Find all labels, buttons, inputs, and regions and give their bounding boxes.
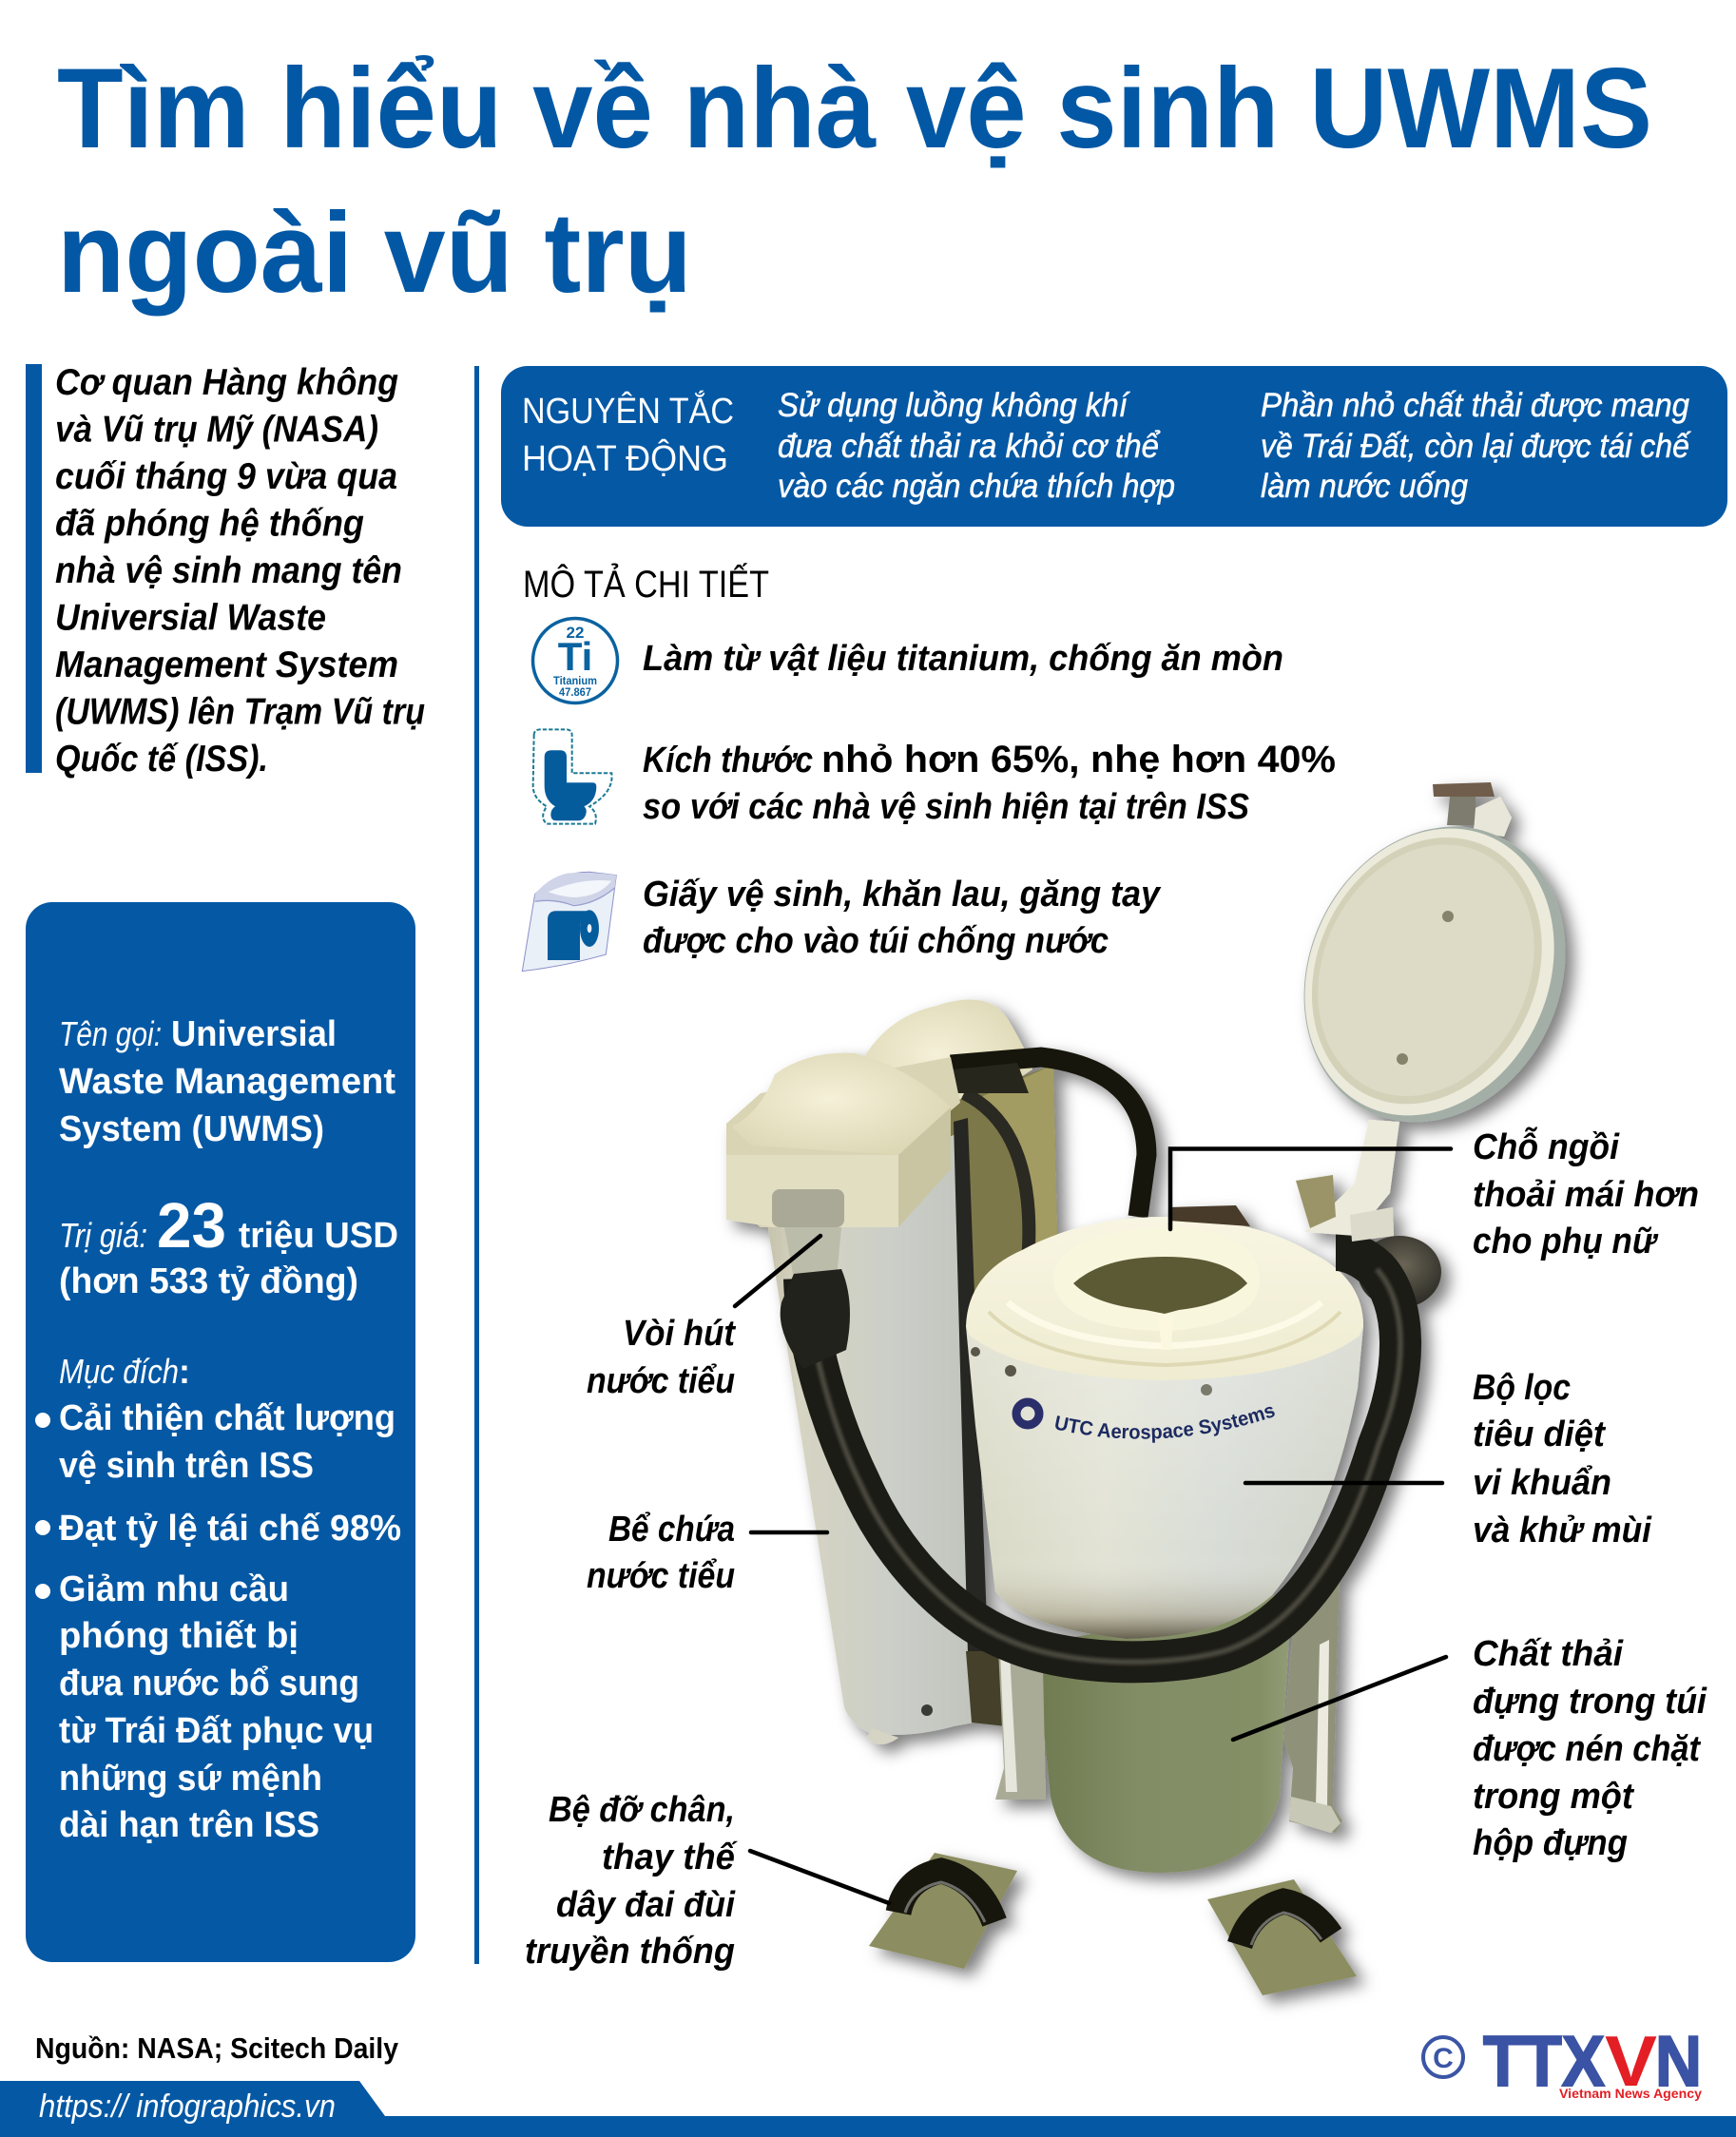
callout: filter: tiêu diệt	[1473, 1415, 1606, 1454]
detail: size	[643, 739, 1336, 827]
purposes list: từ Trái Đất phục vụ	[59, 1711, 374, 1751]
callout: filter: Bộ lọc	[1473, 1368, 1571, 1408]
purposes list: Cải thiện chất lượng	[59, 1398, 395, 1438]
panel: key facts	[26, 902, 415, 1962]
price: triệu USD	[239, 1216, 398, 1256]
logo UTC Aerospace Systems: UTC Aerospace Systems	[1055, 1407, 1275, 1443]
detail: waterproof bag	[643, 875, 1162, 961]
purposes list: :	[179, 1352, 190, 1391]
icon: titanium element	[532, 618, 618, 703]
logo: TTXVN: N	[1655, 2021, 1702, 2101]
right bracket	[1283, 1578, 1342, 1833]
callout: seat: cho phụ nữ	[1473, 1222, 1659, 1261]
footer bar with url tab: https:// infographics.vn	[39, 2089, 336, 2125]
icon: toilet	[533, 729, 612, 824]
intro text block: Cơ quan Hàng không	[55, 362, 398, 403]
panel: operating principle: NGUYÊN TẮC	[522, 390, 734, 432]
callout: foot pad: dây đai đùi	[556, 1885, 736, 1925]
name of system: Tên gọi:	[59, 1014, 162, 1053]
price: 23	[157, 1190, 226, 1261]
purposes list	[35, 1352, 401, 1845]
seat hole	[1073, 1257, 1247, 1314]
logo: TTXVN: C	[1433, 2043, 1454, 2074]
dark strip between tank and seat body	[954, 1118, 989, 1673]
callout: foot pad: thay thế	[602, 1838, 739, 1877]
name of system: Universial	[171, 1014, 337, 1054]
name of system	[59, 1014, 395, 1149]
purposes list: vệ sinh trên ISS	[59, 1446, 314, 1486]
purposes list: phóng thiết bị	[59, 1616, 299, 1656]
callout: nozzle: nước tiểu	[587, 1361, 735, 1401]
intro text block: cuối tháng 9 vừa qua	[55, 456, 397, 497]
detail: size: so với các nhà vệ sinh hiện tại trên ISS	[643, 787, 1249, 827]
intro text block: Universial Waste	[55, 597, 326, 639]
panel: operating principle: đưa chất thải ra khỏi cơ thể	[778, 428, 1160, 465]
callout: filter: và khử mùi	[1473, 1511, 1652, 1550]
seat opening	[1053, 1227, 1260, 1331]
callout: nozzle: Vòi hút	[623, 1314, 736, 1354]
seat cap	[966, 1217, 1363, 1396]
logo: TTXVN: Vietnam News Agency	[1559, 2086, 1702, 2101]
callout line: nozzle	[735, 1236, 820, 1306]
callout line: urine tank	[751, 1531, 827, 1534]
purposes list: dài hạn trên ISS	[59, 1805, 319, 1845]
intro text block: Quốc tế (ISS).	[55, 739, 268, 780]
detail: waterproof bag: Giấy vệ sinh, khăn lau, găng tay	[643, 875, 1162, 914]
callout: seat: thoải mái hơn	[1473, 1175, 1699, 1215]
callout: waste: trong một	[1473, 1777, 1634, 1817]
right foot pad	[1207, 1879, 1357, 1995]
price: (hơn 533 tỷ đồng)	[59, 1261, 358, 1301]
callout: urine tank	[587, 1510, 735, 1596]
callout: seat	[1473, 1126, 1699, 1261]
callout: urine tank: Bể chứa	[608, 1510, 735, 1550]
callout: urine tank: nước tiểu	[587, 1556, 735, 1596]
mechanism behind seat	[1168, 1205, 1250, 1226]
callout: waste: Chất thải	[1473, 1634, 1624, 1674]
intro text block: (UWMS) lên Trạm Vũ trụ	[55, 692, 425, 732]
photo: UWMS toilet hardware	[724, 780, 1585, 2012]
detail heading: MÔ TẢ CHI TIẾT	[523, 562, 769, 606]
callout line: foot pad	[750, 1851, 889, 1903]
title: Tìm hiểu về nhà vệ sinh UWMS	[57, 45, 1652, 172]
detail: size: Kích thước	[643, 741, 813, 780]
callout: nozzle	[587, 1314, 736, 1401]
seat body	[966, 1326, 1363, 1639]
callout line: seat	[1170, 1148, 1451, 1229]
urine nozzle	[772, 1189, 844, 1227]
panel: operating principle: vào các ngăn chứa thích hợp	[778, 468, 1175, 505]
name of system: Waste Management	[59, 1062, 395, 1102]
callout line: waste	[1233, 1657, 1446, 1740]
logo: TTXVN	[1423, 2021, 1702, 2101]
logo: TTXVN: TTX	[1483, 2021, 1605, 2101]
name of system: System (UWMS)	[59, 1109, 324, 1149]
lid top hinge	[1433, 782, 1512, 837]
panel: operating principle: Phần nhỏ chất thải được mang	[1261, 387, 1689, 424]
callout: waste: đựng trong túi	[1473, 1682, 1707, 1722]
purposes list: đưa nước bổ sung	[59, 1664, 359, 1704]
thin black hose	[951, 1057, 1147, 1217]
callout: seat: Chỗ ngồi	[1473, 1126, 1620, 1167]
intro text block: nhà vệ sinh mang tên	[55, 550, 402, 591]
detail: material: Làm từ vật liệu titanium, chống ăn mòn	[643, 639, 1283, 679]
purposes list: Đạt tỷ lệ tái chế 98%	[59, 1509, 401, 1549]
icon: titanium element: Ti	[558, 634, 592, 679]
lid arm and hinge	[1296, 1120, 1399, 1242]
callout: filter	[1473, 1368, 1652, 1550]
callout: foot pad: truyền thống	[525, 1932, 735, 1972]
panel: operating principle: HOẠT ĐỘNG	[522, 437, 728, 479]
icon: titanium element: 22	[567, 624, 584, 642]
icon: waterproof bag with paper roll	[522, 872, 616, 972]
purposes list: Giảm nhu cầu	[59, 1569, 289, 1609]
icon: titanium element: 47.867	[559, 685, 591, 699]
panel: operating principle: Sử dụng luồng không khí	[778, 387, 1130, 424]
tank top cap	[726, 1057, 960, 1227]
dark knob	[1358, 1236, 1441, 1308]
callout: waste: được nén chặt	[1473, 1729, 1701, 1769]
title	[57, 45, 1652, 317]
callout: waste	[1473, 1634, 1707, 1863]
panel: operating principle	[501, 366, 1727, 527]
lower olive canister	[1034, 1578, 1333, 1873]
left foot pad	[869, 1853, 1017, 1969]
logo: TTXVN: V	[1605, 2021, 1657, 2101]
intro text block: đã phóng hệ thống	[55, 504, 364, 544]
callout: foot pad	[525, 1790, 739, 1972]
footer bar with url tab	[0, 2081, 1736, 2137]
detail: waterproof bag: được cho vào túi chống nước	[643, 921, 1109, 961]
callout: filter: vi khuẩn	[1473, 1463, 1611, 1503]
title: ngoài vũ trụ	[57, 189, 692, 317]
callout: waste: hộp đựng	[1473, 1823, 1628, 1863]
thick corrugated hose	[781, 1250, 1400, 1662]
intro text block: và Vũ trụ Mỹ (NASA)	[55, 409, 378, 451]
intro text block: Management System	[55, 645, 398, 685]
panel: operating principle: làm nước uống	[1261, 468, 1468, 505]
purposes list: những sứ mệnh	[59, 1759, 322, 1799]
callout: foot pad: Bệ đỡ chân,	[549, 1790, 735, 1830]
purposes list: Mục đích	[59, 1352, 179, 1391]
intro text block	[26, 362, 425, 780]
olive rear panel	[951, 1065, 1057, 1293]
price: Trị giá:	[59, 1216, 147, 1255]
open lid	[1257, 783, 1612, 1165]
urine tank body	[766, 1131, 984, 1735]
left bracket	[995, 1649, 1046, 1800]
source: Nguồn: NASA; Scitech Daily	[35, 2031, 399, 2065]
detail: size: nhỏ hơn 65%, nhẹ hơn 40%	[821, 739, 1336, 780]
machinery between tank and bracket	[966, 1651, 1006, 1726]
icon: titanium element: Titanium	[553, 674, 597, 687]
price	[59, 1190, 398, 1301]
panel: operating principle: về Trái Đất, còn lại được tái chế	[1261, 428, 1691, 465]
callout line: filter	[1245, 1481, 1442, 1485]
rear dome	[859, 1000, 1032, 1122]
